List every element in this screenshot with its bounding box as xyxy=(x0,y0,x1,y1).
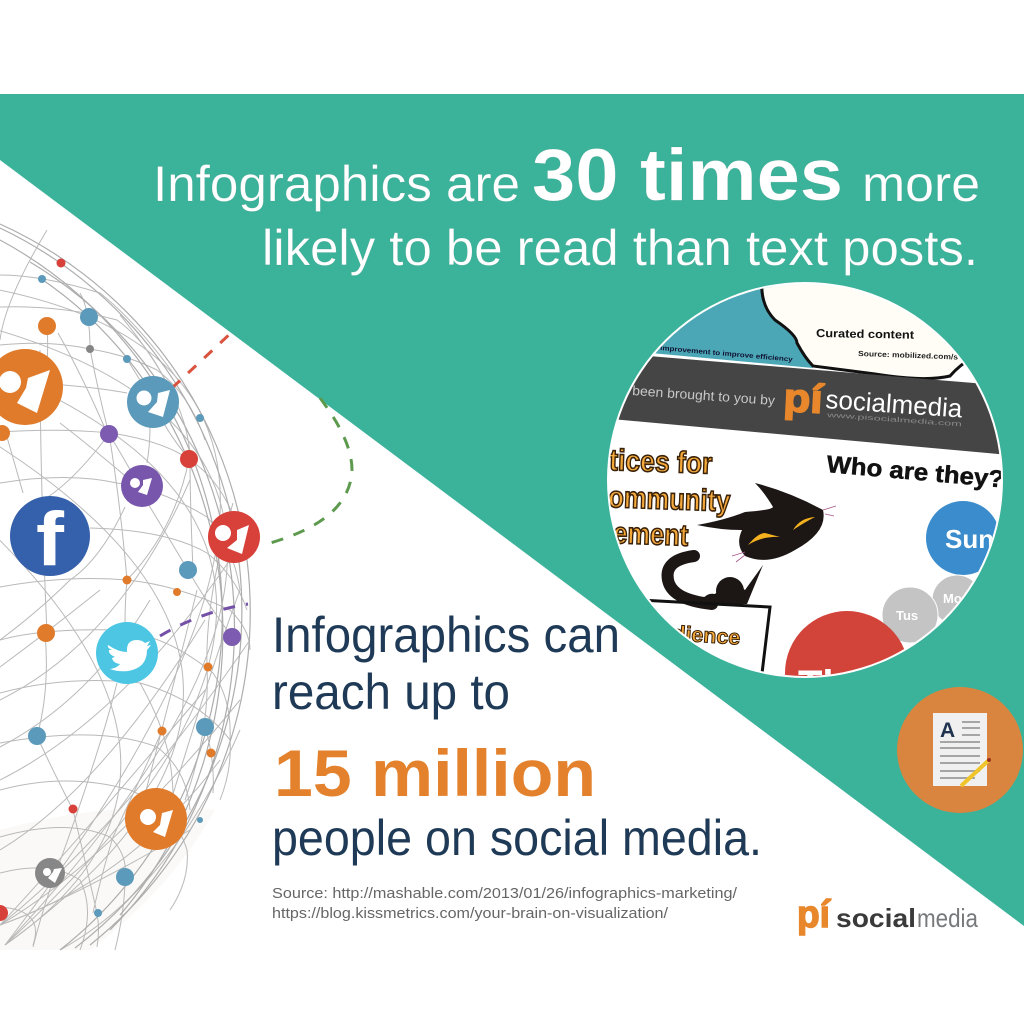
dashed connector: purple xyxy=(160,604,248,636)
heading: 30 times more likely: more xyxy=(862,156,980,212)
day bubble: Thu: Th xyxy=(798,663,847,707)
icon: gray people bubble xyxy=(35,858,65,888)
dashed connector: green xyxy=(270,398,352,543)
heading: 30 times more likely: likely to be read than text posts. xyxy=(262,220,978,276)
globe network xyxy=(0,224,352,950)
cream cloud xyxy=(760,284,964,380)
icon: document on orange circle: A xyxy=(940,719,955,742)
network nodes xyxy=(0,258,241,921)
teal header block xyxy=(655,286,813,368)
globe rim xyxy=(0,224,250,950)
white box with outline xyxy=(649,599,772,672)
heading: 30 times more likely: Infographics are xyxy=(153,156,520,212)
panel: infographic screenshot circle xyxy=(607,282,1003,678)
day bubble: Sun: Sun xyxy=(945,524,994,554)
icon: facebook xyxy=(10,496,90,582)
heading: 30 times more likely: 30 times xyxy=(532,135,843,216)
heading: 30 times more likely xyxy=(153,135,980,276)
day bubble: Thu xyxy=(785,611,904,676)
day bubble: Mon xyxy=(932,574,973,620)
orange outlined title: tices for xyxy=(609,444,713,481)
dashed connector: red xyxy=(172,332,232,388)
logo: pi socialmedia: pí xyxy=(797,894,831,936)
source text: Source: http://mashable.com/2013/01/26/infographics-marketing/ xyxy=(272,886,738,902)
text block: reach statistic: reach up to xyxy=(272,664,510,720)
logo: pi socialmedia xyxy=(797,894,978,936)
faint watermark at globe base xyxy=(0,808,215,950)
day bubble: Mon: Mo xyxy=(943,591,962,606)
audience text: dience xyxy=(672,622,741,650)
icon: facebook: f xyxy=(36,497,65,582)
text block: reach statistic: Infographics can xyxy=(272,607,620,663)
orange outlined title: ommunity xyxy=(608,481,731,518)
source text xyxy=(272,886,738,922)
band text: been brought to you by xyxy=(632,383,776,408)
icon: blue people bubble xyxy=(127,376,179,428)
icon: orange people bubble large xyxy=(0,349,63,425)
globe mesh lines xyxy=(0,230,250,950)
logo: pi socialmedia: social xyxy=(836,903,916,933)
icon: twitter xyxy=(96,622,158,684)
text block: reach statistic xyxy=(272,607,762,866)
dark brand band xyxy=(618,356,1000,454)
day bubble: Sun xyxy=(926,501,1000,575)
icon: document on orange circle xyxy=(897,687,1023,813)
source text: https://blog.kissmetrics.com/your-brain-on-visualization/ xyxy=(272,906,669,922)
band logo pi: pí xyxy=(783,376,826,422)
icon: red people bubble xyxy=(208,511,260,563)
curated content text: Curated content xyxy=(816,328,914,342)
who are they: Who are they? xyxy=(825,451,1005,493)
orange outlined title: ement xyxy=(613,517,689,553)
day bubble: Tus xyxy=(882,587,938,643)
icon: purple people bubble xyxy=(121,465,163,507)
orange outlined title xyxy=(608,444,731,553)
source caption: Source: mobilized.com/s xyxy=(858,349,958,361)
black cat xyxy=(668,483,836,605)
logo: pi socialmedia: media xyxy=(917,903,978,933)
icon: orange people bubble lower xyxy=(125,788,187,850)
improvement caption: improvement to improve efficiency xyxy=(660,345,793,364)
text block: reach statistic: 15 million xyxy=(274,736,596,810)
day bubble: Tus: Tus xyxy=(896,608,918,623)
band url: www.pisocialmedia.com xyxy=(825,412,962,428)
text block: reach statistic: people on social media. xyxy=(272,810,762,866)
band logo wordmark: socialmedia xyxy=(825,384,964,424)
